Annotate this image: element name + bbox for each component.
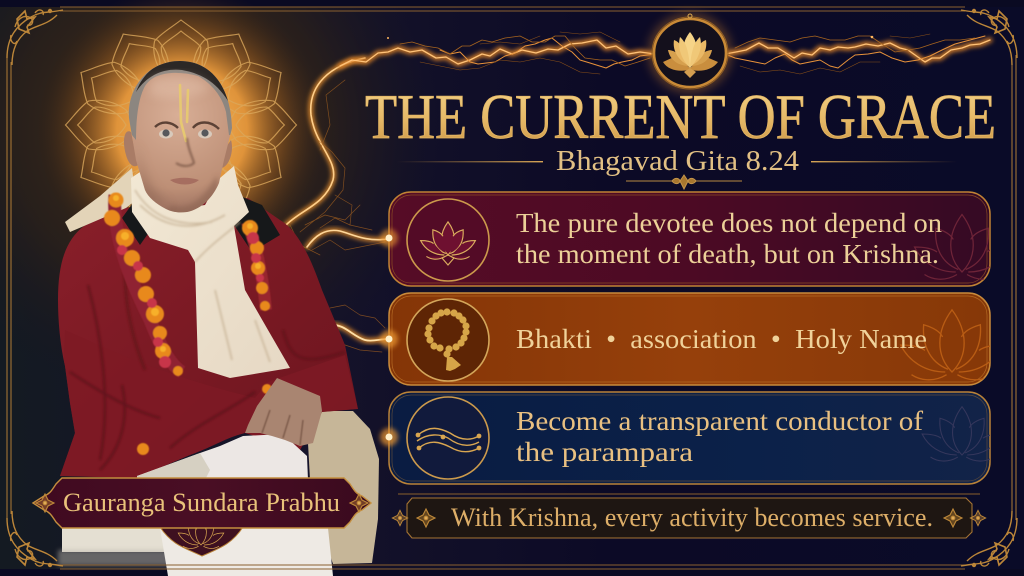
lotus under plaque — [160, 517, 243, 556]
white dhoti — [58, 434, 333, 576]
icon: lotus — [407, 199, 489, 281]
corner ornament bottom-right — [961, 511, 1017, 566]
hand on knee — [245, 378, 322, 446]
corner ornament top-left — [7, 10, 63, 65]
scarf — [131, 166, 290, 378]
lotus medallion — [648, 13, 732, 93]
corner ornament bottom-left — [7, 511, 63, 566]
cream shawl flap — [65, 168, 136, 232]
head — [128, 61, 232, 212]
ears — [124, 131, 232, 168]
watermark lotus — [921, 406, 990, 462]
icon: prayer beads — [407, 299, 489, 381]
panel: transparent conductor: the parampara — [516, 437, 693, 467]
beige cloth on the knee — [308, 411, 379, 564]
icon: gold lotus — [663, 32, 718, 78]
corner ornament top-right — [961, 10, 1017, 65]
robe — [58, 198, 358, 478]
small flourish — [626, 175, 742, 189]
watermark lotus — [914, 214, 990, 280]
name plaque: Gauranga Sundara Prabhu — [33, 478, 371, 556]
flower garland — [104, 192, 272, 455]
panel: pure devotee — [380, 192, 1010, 286]
panel: pure devotee: The pure devotee does not depend on — [516, 208, 943, 238]
halo mandala — [37, 0, 327, 275]
connector node — [380, 428, 398, 446]
connector node — [380, 229, 398, 247]
panel: pure devotee: the moment of death, but on Krishna. — [516, 239, 939, 269]
panel: bhakti association holy name: Bhakti • association • Holy Name — [516, 324, 927, 354]
watermark lotus — [901, 310, 1003, 380]
top lightning current — [340, 32, 990, 74]
tilak — [180, 85, 188, 141]
nose and mouth — [170, 138, 199, 184]
panel: transparent conductor — [380, 392, 1002, 484]
subtitle with rules: Bhagavad Gita 8.24 — [556, 145, 800, 177]
name plaque: Gauranga Sundara Prabhu: Gauranga Sundara Prabhu — [63, 487, 340, 517]
closing banner: With Krishna, every activity becomes service. — [451, 503, 933, 532]
closing banner — [392, 494, 986, 538]
lightning from portrait to top bar — [285, 58, 388, 437]
eyes — [155, 122, 219, 138]
dark collar — [122, 196, 280, 252]
panel: transparent conductor: Become a transparent conductor of — [516, 406, 923, 436]
connector node — [380, 330, 398, 348]
panel: bhakti association holy name — [380, 293, 1003, 385]
icon: flowing current lines — [407, 397, 489, 479]
portrait: seated devotee — [50, 55, 379, 576]
